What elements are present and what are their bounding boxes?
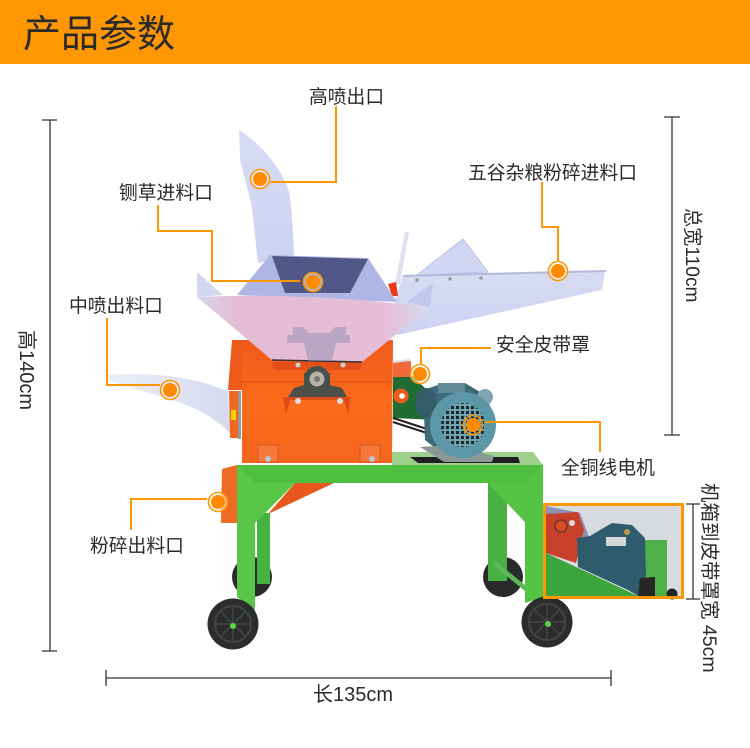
title: 产品参数 [23,14,175,56]
machine illustration [108,130,606,650]
callout: motor [464,416,655,478]
orange machine body [228,340,393,463]
motor [415,383,496,462]
callout: grain feed inlet: 五谷杂粮粉碎进料口 [468,162,637,183]
green table [237,452,543,610]
lever [395,232,409,284]
callout: belt guard: 安全皮带罩 [496,334,590,355]
inset photo [544,504,682,600]
dimension: case to belt guard width [686,483,720,673]
dimension: length [106,670,611,706]
callout: middle spout: 中喷出料口 [69,295,163,316]
middle spout chute [108,374,230,433]
callout: crush discharge: 粉碎出料口 [90,535,184,556]
callout: high spout: 高喷出口 [309,86,384,107]
dimension: height: 高140cm [15,330,38,410]
dimension: case to belt guard width: 机箱到皮带罩宽 45cm [698,483,720,673]
dimension: total width: 总宽110cm [681,208,703,303]
high spout chute [239,130,294,263]
bearing block [288,373,347,397]
callout: belt guard [410,334,590,384]
grain feed chute [395,239,606,335]
callout: motor: 全铜线电机 [561,457,655,478]
lower discharge [221,465,237,523]
callout: middle spout [69,295,180,400]
callout: straw feed inlet [119,182,322,292]
dimension: total width [664,117,703,435]
rear wheels [232,557,523,597]
rear legs [257,483,525,591]
dimension: height [15,120,57,651]
header banner [0,0,750,64]
callout: high spout [250,86,384,188]
dimension: length: 长135cm [313,683,393,706]
belt guard [393,360,437,434]
callout: grain feed inlet [468,162,637,280]
front wheels [208,596,572,650]
callout: crush discharge [90,492,228,556]
hopper [197,255,433,362]
callout: straw feed inlet: 铡草进料口 [119,182,213,203]
